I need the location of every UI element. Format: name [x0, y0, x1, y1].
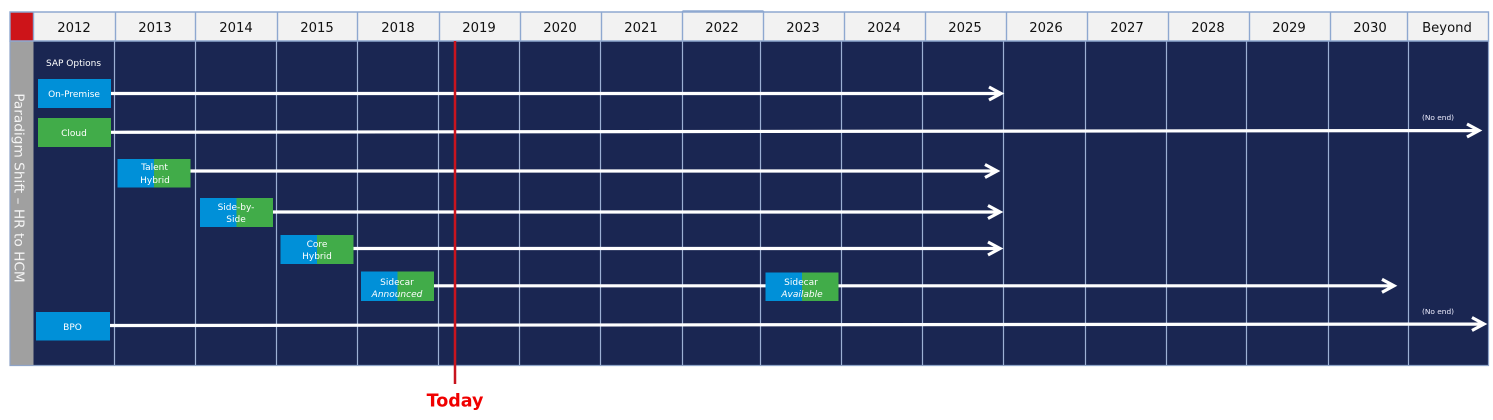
today line	[454, 41, 456, 384]
arrow: Side-by-Side	[272, 206, 1000, 218]
box: Side-by-Side: Side	[226, 215, 246, 225]
arrow: Core Hybrid	[352, 242, 1000, 255]
year labels: 2023	[786, 21, 820, 36]
box: Talent Hybrid	[118, 159, 190, 188]
box: On-Premise	[38, 79, 111, 108]
box: Side-by-Side	[200, 198, 273, 227]
year labels: 2015	[300, 21, 334, 36]
year labels: 2014	[219, 21, 253, 36]
year labels: 2027	[1110, 21, 1144, 36]
panel: side label bar	[10, 41, 1488, 366]
year labels: 2029	[1272, 21, 1306, 36]
header row	[10, 11, 1488, 41]
year labels: 2028	[1191, 21, 1225, 36]
box: Cloud	[38, 118, 111, 147]
box: Side-by-Side: Side-by-	[218, 203, 254, 213]
box: Sidecar Available	[766, 272, 838, 301]
box: Sidecar Announced: Announced	[371, 290, 423, 300]
year labels: 2024	[867, 21, 901, 36]
box: Sidecar Available: Sidecar	[784, 278, 818, 288]
year labels: 2018	[381, 21, 415, 36]
box: Talent Hybrid: Hybrid	[140, 176, 170, 186]
arrow: Cloud	[110, 124, 1479, 137]
year labels: 2012	[57, 21, 91, 36]
box: Talent Hybrid: Talent	[140, 163, 168, 173]
today label: Today	[427, 392, 484, 412]
year labels: Beyond	[1422, 21, 1472, 36]
year labels: 2021	[624, 21, 658, 36]
year labels: 2022	[705, 21, 739, 36]
year labels: 2030	[1353, 21, 1387, 36]
box: Cloud: Cloud	[61, 129, 87, 139]
year labels: 2019	[462, 21, 496, 36]
heading: SAP Options: SAP Options	[46, 59, 101, 69]
label: no end, BPO: (No end)	[1422, 307, 1454, 316]
arrow: BPO	[109, 318, 1484, 330]
box: On-Premise: On-Premise	[48, 90, 100, 100]
side label: Paradigm Shift – HR to HCM	[10, 93, 26, 283]
red corner block	[10, 12, 34, 41]
box: Sidecar Announced: Sidecar	[380, 278, 414, 288]
box: BPO: BPO	[63, 323, 82, 333]
arrow: Sidecar	[433, 279, 1394, 292]
box: Core Hybrid	[280, 235, 354, 264]
label: no end, Cloud: (No end)	[1422, 113, 1454, 122]
box: BPO	[36, 312, 110, 340]
grid lines	[114, 41, 1408, 365]
year labels: 2020	[543, 21, 577, 36]
box: Sidecar Announced	[361, 272, 434, 301]
box: Sidecar Available: Available	[780, 290, 823, 300]
arrow: On-Premise	[110, 87, 1001, 100]
year labels: 2013	[138, 21, 172, 36]
year labels: 2025	[948, 21, 982, 36]
year labels	[57, 21, 1472, 36]
arrow: Talent Hybrid	[189, 164, 997, 178]
box: Core Hybrid: Hybrid	[302, 252, 332, 262]
panel: timeline body	[33, 41, 1488, 366]
box: Core Hybrid: Core	[307, 240, 328, 250]
year labels: 2026	[1029, 21, 1063, 36]
